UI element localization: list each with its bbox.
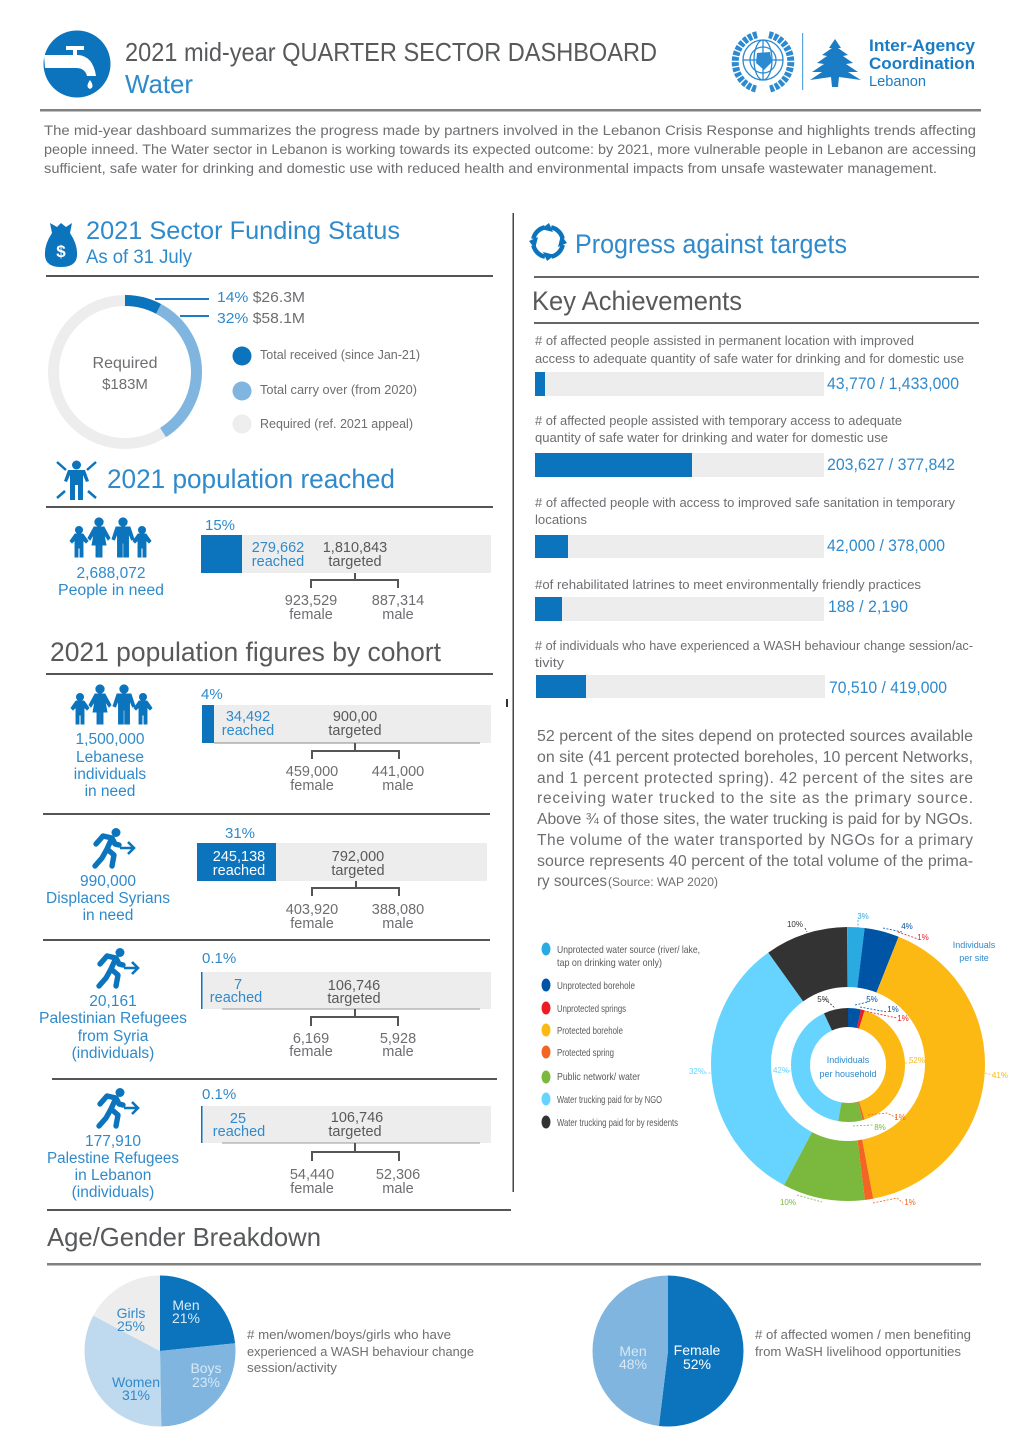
indicator 1 bbox=[535, 334, 964, 396]
ring labels: 41% bbox=[992, 1071, 1008, 1080]
indicator 4: 188 / 2,190 bbox=[828, 598, 908, 616]
reached: 245,138 bbox=[213, 849, 265, 865]
targeted: targeted bbox=[328, 723, 382, 739]
pie labels: age: Women bbox=[112, 1374, 160, 1390]
indicator 2: # of affected people assisted with temporary access to adequate bbox=[535, 414, 902, 428]
narrative paragraph: The volume of the water transported by NGOs for a primary bbox=[537, 832, 973, 849]
icon: person with rays bbox=[57, 460, 96, 500]
label: Lebanese bbox=[76, 749, 144, 766]
indicator 4: #of rehabilitated latrines to meet environmentally friendly practices bbox=[535, 578, 921, 592]
female male: male bbox=[382, 1044, 414, 1060]
icon: family bbox=[71, 685, 152, 724]
legend: water sources: Unprotected borehole bbox=[557, 980, 635, 992]
label: Displaced Syrians bbox=[46, 890, 170, 907]
pie caption: age: session/activity bbox=[247, 1360, 338, 1375]
ring labels: 5% bbox=[866, 995, 878, 1004]
funding donut bbox=[54, 300, 196, 444]
reached: reached bbox=[252, 554, 304, 570]
reached: reached bbox=[222, 723, 274, 739]
female male: female bbox=[290, 916, 334, 932]
people in need: People in need bbox=[58, 582, 164, 599]
legend: water sources: Water trucking paid for by residents bbox=[557, 1117, 678, 1129]
reached bbox=[222, 709, 274, 739]
targeted: 106,746 bbox=[331, 1110, 383, 1126]
female male: 5,928 bbox=[380, 1031, 416, 1047]
heading: cohort: 2021 population figures by cohort bbox=[50, 637, 441, 667]
bracket bbox=[312, 1143, 399, 1161]
percent: 0.1% bbox=[202, 950, 236, 967]
female male: female bbox=[290, 778, 334, 794]
indicator 2: 203,627 / 377,842 bbox=[827, 456, 955, 474]
pie labels: age: Boys bbox=[190, 1360, 222, 1376]
icon: money bag: $ bbox=[56, 242, 66, 261]
label: in need bbox=[85, 783, 135, 800]
pie labels: age bbox=[112, 1297, 222, 1403]
indicator 3: 42,000 / 378,000 bbox=[827, 537, 945, 555]
targeted bbox=[328, 709, 382, 739]
panel: age gender breakdown bbox=[47, 1222, 981, 1403]
pie labels: gender: 48% bbox=[619, 1356, 647, 1372]
legend: funding: Total carry over (from 2020) bbox=[260, 383, 417, 397]
ring labels: 1% bbox=[887, 1005, 899, 1014]
label bbox=[46, 873, 170, 924]
label: individuals bbox=[74, 766, 146, 783]
leader lines bbox=[705, 920, 993, 1203]
female male: male bbox=[382, 607, 414, 623]
narrative paragraph: ry sources bbox=[537, 873, 607, 890]
targeted: 792,000 bbox=[332, 849, 384, 865]
targeted: 900,00 bbox=[333, 709, 377, 725]
female male: male bbox=[382, 916, 414, 932]
indicator 2 bbox=[535, 414, 955, 477]
reached: 34,492 bbox=[226, 709, 270, 725]
pie caption: age: # men/women/boys/girls who have bbox=[247, 1327, 451, 1342]
panel: Lebanese bbox=[71, 685, 491, 800]
female male: female bbox=[289, 1044, 333, 1060]
centre label: Individuals bbox=[827, 1055, 870, 1065]
label: Palestinian Refugees bbox=[39, 1010, 187, 1027]
icon: runner bbox=[99, 1088, 138, 1126]
female male bbox=[286, 764, 424, 794]
donut centre label: $183M bbox=[102, 376, 148, 393]
pie labels: gender: 52% bbox=[683, 1356, 711, 1372]
female male: 923,529 bbox=[285, 593, 337, 609]
intro text: people inneed. The Water sector in Lebanon is working towards its expected outcome: by 2021, more vulnerable people in Lebanon are accessing bbox=[44, 142, 976, 157]
ring labels: 4% bbox=[901, 922, 913, 931]
pie: gender bbox=[630, 1313, 706, 1389]
percent: 0.1% bbox=[202, 1086, 236, 1103]
ring labels: 52% bbox=[909, 1056, 925, 1065]
female male: 887,314 bbox=[372, 593, 424, 609]
indicator 5 bbox=[535, 639, 973, 698]
centre label: per household bbox=[819, 1069, 877, 1079]
narrative paragraph: Above ¾ of those sites, the water trucking is paid for by NGOs. bbox=[537, 811, 973, 828]
reached: reached bbox=[213, 863, 265, 879]
female male: male bbox=[382, 778, 414, 794]
label bbox=[74, 731, 146, 800]
indicator 1: # of affected people assisted in permanent location with improved bbox=[535, 334, 914, 348]
targeted: targeted bbox=[327, 991, 381, 1007]
bracket bbox=[312, 881, 399, 896]
bracket bbox=[311, 573, 398, 588]
icon: water tap bbox=[44, 30, 110, 98]
logo text: Inter-Agency Coordination Lebanon: Coordination bbox=[869, 54, 975, 73]
title: 2021 mid-year QUARTER SECTOR DASHBOARD bbox=[125, 37, 657, 67]
legend: water sources: tap on drinking water only) bbox=[557, 957, 662, 969]
female male bbox=[286, 902, 424, 932]
narrative paragraph: source represents 40 percent of the total volume of the prima- bbox=[537, 853, 973, 870]
narrative paragraph: receiving water trucked to the site as the primary source. bbox=[537, 790, 973, 807]
label: (individuals) bbox=[72, 1045, 154, 1062]
reached: 7 bbox=[234, 977, 242, 993]
intro text: sufficient, safe water for drinking and domestic use with reduced health and environmental impacts from unsafe wastewater management. bbox=[44, 161, 937, 176]
label: Palestine Refugees bbox=[47, 1150, 179, 1167]
pie caption: gender: from WaSH livelihood opportunities bbox=[755, 1344, 961, 1359]
narrative paragraph: (Source: WAP 2020) bbox=[608, 877, 718, 889]
panel: Displaced Syrians bbox=[46, 825, 487, 932]
targeted: targeted bbox=[331, 863, 385, 879]
bracket bbox=[311, 1009, 398, 1026]
callout: carry over bbox=[180, 310, 305, 327]
legend: water sources: Protected borehole bbox=[557, 1025, 623, 1037]
heading: key achievements: Key Achievements bbox=[532, 286, 742, 316]
reached: 279,662 bbox=[252, 540, 304, 556]
reached bbox=[210, 977, 262, 1006]
legend: funding: Required (ref. 2021 appeal) bbox=[260, 417, 413, 431]
female male: 459,000 bbox=[286, 764, 338, 780]
indicator 3 bbox=[535, 496, 956, 558]
progress bar bbox=[201, 535, 491, 573]
intro text bbox=[44, 123, 976, 176]
bracket bbox=[312, 743, 399, 759]
female male: 403,920 bbox=[286, 902, 338, 918]
legend: funding: Total received (since Jan-21) bbox=[260, 348, 420, 362]
ring labels: 1% bbox=[917, 933, 929, 942]
indicator 5: # of individuals who have experienced a WASH behaviour change session/ac- bbox=[535, 639, 973, 653]
narrative paragraph: on site (41 percent protected boreholes, 10 percent Networks, bbox=[537, 749, 973, 766]
label: 990,000 bbox=[80, 873, 136, 890]
logo text: Inter-Agency Coordination Lebanon: Lebanon bbox=[869, 73, 926, 90]
intro text: The mid-year dashboard summarizes the progress made by partners involved in the Lebanon Crisis Response and highlights trends affecting bbox=[44, 123, 976, 138]
panel: population reached bbox=[46, 460, 493, 623]
targeted bbox=[331, 849, 385, 879]
pie caption: gender: # of affected women / men benefiting bbox=[755, 1327, 971, 1342]
progress bar bbox=[197, 843, 487, 881]
label: 20,161 bbox=[89, 993, 137, 1010]
label: 1,500,000 bbox=[76, 731, 145, 748]
targeted: targeted bbox=[328, 554, 382, 570]
female male: 441,000 bbox=[372, 764, 424, 780]
icon: money bag bbox=[45, 223, 77, 267]
progress bar bbox=[201, 1106, 491, 1144]
ring labels: 1% bbox=[894, 1113, 906, 1122]
indicator 5: 70,510 / 419,000 bbox=[829, 679, 947, 697]
people in need: 2,688,072 bbox=[77, 565, 145, 582]
centre label bbox=[819, 1055, 877, 1079]
targeted: targeted bbox=[328, 1124, 382, 1140]
callout: carry over: 32% $58.1M bbox=[217, 310, 305, 327]
pie labels: age: 23% bbox=[192, 1374, 220, 1390]
female male: 388,080 bbox=[372, 902, 424, 918]
female male bbox=[289, 1031, 416, 1060]
progress bar bbox=[201, 972, 491, 1010]
heading: progress: Progress against targets bbox=[575, 229, 847, 259]
label: in Lebanon bbox=[75, 1167, 151, 1184]
indicator 4 bbox=[535, 578, 921, 621]
targeted bbox=[323, 540, 387, 570]
targeted bbox=[328, 1110, 383, 1140]
heading: age gender: Age/Gender Breakdown bbox=[47, 1222, 321, 1252]
ring labels: Individuals bbox=[953, 940, 996, 950]
panel: funding status bbox=[45, 217, 493, 444]
reached: reached bbox=[210, 990, 262, 1006]
panel: progress against targets bbox=[529, 223, 1008, 1207]
heading: funding: 2021 Sector Funding Status bbox=[86, 217, 400, 245]
indicator 1: 43,770 / 1,433,000 bbox=[827, 375, 959, 393]
indicator 3: # of affected people with access to improved safe sanitation in temporary bbox=[535, 496, 956, 510]
inner ring bbox=[800, 1018, 896, 1112]
ring labels: 8% bbox=[874, 1123, 886, 1132]
female male: 52,306 bbox=[376, 1167, 420, 1183]
pie: age bbox=[122, 1313, 198, 1389]
donut centre label: Required bbox=[93, 355, 157, 372]
percent: 4% bbox=[201, 686, 223, 703]
female male: female bbox=[289, 607, 333, 623]
ring labels: 5% bbox=[817, 995, 829, 1004]
reached: reached bbox=[213, 1124, 265, 1140]
legend: water sources bbox=[542, 942, 700, 1129]
icon: runner bbox=[99, 948, 138, 986]
female male bbox=[290, 1167, 420, 1197]
label bbox=[39, 993, 187, 1062]
icon: runner bbox=[95, 828, 134, 866]
label: (individuals) bbox=[72, 1184, 154, 1201]
indicator 1: access to adequate quantity of safe water for drinking and for domestic use bbox=[535, 352, 964, 366]
pie labels: age: Girls bbox=[117, 1305, 145, 1321]
icon: cycle arrows bbox=[529, 223, 567, 261]
female male: 6,169 bbox=[293, 1031, 329, 1047]
label: in need bbox=[83, 907, 133, 924]
female male: 54,440 bbox=[290, 1167, 334, 1183]
legend: water sources: Unprotected springs bbox=[557, 1003, 626, 1015]
logo text: Inter-Agency Coordination Lebanon: Inter-Agency bbox=[869, 36, 976, 55]
pie caption: age bbox=[247, 1327, 474, 1375]
legend: funding bbox=[232, 346, 420, 434]
ring labels: per site bbox=[959, 953, 989, 963]
reached bbox=[213, 1111, 265, 1140]
logo text: Inter-Agency Coordination Lebanon bbox=[869, 36, 976, 90]
reached bbox=[252, 540, 304, 570]
ring labels: 1% bbox=[897, 1014, 909, 1023]
indicator 2: quantity of safe water for drinking and water for domestic use bbox=[535, 431, 888, 445]
targeted: 106,746 bbox=[328, 978, 380, 994]
legend: water sources: Unprotected water source (river/ lake, bbox=[557, 944, 700, 956]
label: from Syria bbox=[78, 1028, 149, 1045]
subtitle: Water: Water bbox=[125, 69, 193, 99]
icon: family bbox=[70, 518, 151, 557]
pie caption: age: experienced a WASH behaviour change bbox=[247, 1344, 474, 1359]
pie labels: gender: Female bbox=[674, 1342, 721, 1358]
callout: received: 14% $26.3M bbox=[217, 289, 305, 306]
female male: female bbox=[290, 1181, 334, 1197]
percent 15: 15% bbox=[205, 517, 235, 534]
double donut chart bbox=[689, 912, 1008, 1207]
indicator 3: locations bbox=[535, 513, 587, 527]
percent: 31% bbox=[225, 825, 255, 842]
narrative paragraph bbox=[537, 728, 973, 890]
targeted bbox=[327, 978, 381, 1007]
pie caption: gender bbox=[755, 1327, 971, 1359]
icon: cedar tree bbox=[810, 39, 861, 87]
ring labels: 3% bbox=[857, 912, 869, 921]
pie labels: age: 21% bbox=[172, 1310, 200, 1326]
ring labels: 10% bbox=[787, 920, 803, 929]
ring labels bbox=[689, 912, 1008, 1207]
subheading: date: As of 31 July bbox=[86, 247, 192, 268]
female male: male bbox=[382, 1181, 414, 1197]
panel: Palestine Refugees in Lebanon bbox=[47, 1086, 491, 1201]
ring labels: 10% bbox=[780, 1198, 796, 1207]
legend: water sources: Water trucking paid for by NGO bbox=[557, 1094, 662, 1106]
progress bar bbox=[202, 705, 491, 744]
legend: water sources: Protected spring bbox=[557, 1047, 614, 1059]
divider: logo bbox=[802, 33, 803, 90]
narrative paragraph: and 1 percent protected spring). 42 percent of the sites are bbox=[537, 770, 973, 787]
pie labels: gender bbox=[619, 1342, 721, 1372]
female male bbox=[285, 593, 424, 623]
pie labels: age: 31% bbox=[122, 1387, 150, 1403]
reached: 25 bbox=[230, 1111, 246, 1127]
donut centre label bbox=[93, 355, 157, 393]
icon: UN emblem bbox=[735, 35, 791, 89]
pie labels: age: Men bbox=[172, 1297, 200, 1313]
people in need bbox=[58, 565, 164, 599]
heading: population: 2021 population reached bbox=[107, 464, 395, 494]
ring labels: 1% bbox=[904, 1198, 916, 1207]
panel: Palestinian Refugees from Syria bbox=[39, 948, 491, 1062]
legend: water sources: Public network/ water bbox=[557, 1071, 640, 1083]
reached bbox=[213, 849, 265, 879]
targeted: 1,810,843 bbox=[323, 540, 387, 556]
pie labels: age: 25% bbox=[117, 1318, 145, 1334]
narrative paragraph: 52 percent of the sites depend on protected sources available bbox=[537, 728, 973, 745]
ring labels: 42% bbox=[773, 1066, 789, 1075]
ring labels: 32% bbox=[689, 1067, 705, 1076]
label: 177,910 bbox=[85, 1133, 141, 1150]
pie labels: gender: Men bbox=[619, 1343, 647, 1359]
label bbox=[47, 1133, 179, 1201]
indicator 5: tivity bbox=[535, 656, 565, 670]
outer ring bbox=[741, 957, 955, 1171]
header rule bbox=[40, 109, 981, 112]
